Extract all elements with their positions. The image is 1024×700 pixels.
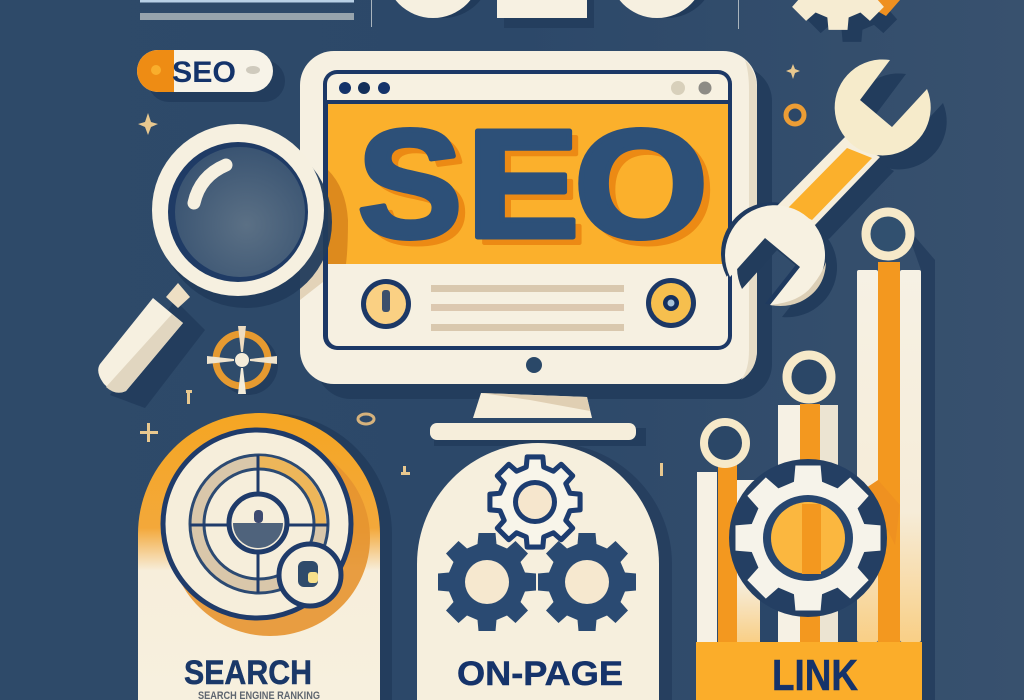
SEO headline: S: [364, 103, 469, 276]
lens highlight: [194, 165, 226, 203]
wrench lower head: [725, 205, 825, 305]
gear: top: [490, 457, 580, 547]
SEO headline: [358, 97, 715, 276]
orange screen: [328, 104, 728, 264]
SEO pill badge: [137, 50, 285, 102]
panel: on-page: [417, 443, 672, 700]
wrench handle: [773, 137, 880, 225]
panel: search: [138, 413, 392, 700]
on-page label: ON-PAGE: [457, 655, 623, 693]
dark stripes below gear: [760, 590, 778, 642]
panel: link: [696, 212, 935, 700]
pill label: SEO: [172, 56, 236, 89]
SEO headline: O: [581, 104, 715, 276]
browser title bar: [327, 74, 728, 100]
SEO headline: E: [473, 104, 586, 276]
gear: lower left: [438, 533, 536, 631]
link column: middle: [778, 355, 838, 642]
search label: SEARCH: [184, 654, 312, 692]
power button: [526, 357, 542, 373]
large gear: [729, 459, 887, 617]
target icon: [207, 326, 278, 395]
monitor stand: [430, 393, 636, 440]
small decorative marks: [138, 64, 800, 476]
wrench: [722, 59, 947, 317]
link label band: [696, 642, 922, 700]
gear: lower right: [538, 533, 636, 631]
monitor: [300, 51, 772, 446]
SEO headline: E: [466, 98, 579, 270]
link column: left: [697, 422, 760, 642]
radar icon: [163, 430, 351, 618]
magnifying glass: [98, 124, 332, 408]
SEO headline: S: [358, 97, 462, 270]
lower screen panel: [328, 264, 728, 346]
wrench upper head: [835, 59, 931, 155]
small orange ring: [786, 106, 804, 124]
SEO headline: O: [574, 98, 708, 270]
link label: LINK: [772, 651, 858, 700]
lock badge: [279, 544, 341, 606]
top cropped elements: [140, 0, 906, 42]
link column: right: [857, 212, 921, 642]
handle: [98, 283, 190, 393]
